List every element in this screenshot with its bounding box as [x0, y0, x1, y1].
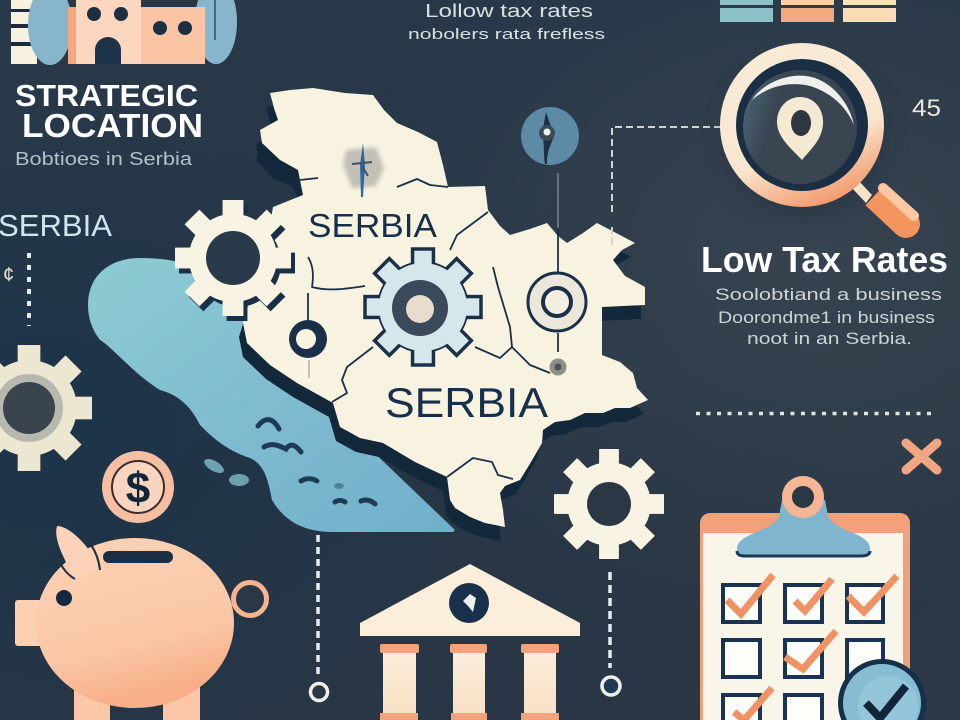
top text block: low tax rates	[408, 1, 605, 43]
text: low tax rates description: Soolobtiand a business	[715, 285, 942, 304]
label: map serbia lower: SERBIA	[385, 379, 548, 426]
clipboard clip	[737, 481, 870, 556]
text: low tax rates description: Doorondme1 in business	[718, 308, 935, 327]
node ring: right bottom	[602, 677, 620, 695]
heading: low tax rates: Low Tax Rates	[701, 239, 948, 280]
icon: coin	[102, 451, 174, 523]
dashed line: right bottom	[608, 572, 612, 668]
icon: piggy bank	[15, 526, 266, 720]
gear: right bottom	[554, 449, 664, 559]
icon: bank building	[360, 564, 580, 720]
dashed connector: to magnifier	[612, 127, 722, 247]
map: serbia	[243, 88, 648, 527]
text: low tax rates description: noot in an Serbia.	[747, 329, 912, 348]
icon: coin: $	[126, 464, 150, 513]
map shadow	[239, 102, 644, 541]
column left	[380, 644, 419, 720]
icon: top colour bars	[720, 0, 896, 22]
small number: 45	[912, 95, 941, 122]
heading: strategic location: LOCATION	[22, 107, 203, 144]
icon: coral x	[906, 443, 937, 470]
text: strategic location caption: Bobtioes in Serbia	[15, 149, 193, 169]
islands	[202, 420, 375, 504]
column right	[521, 644, 559, 720]
icon: magnifier	[720, 43, 920, 238]
heading: strategic location: STRATEGIC	[15, 78, 198, 113]
icon: city buildings	[11, 0, 237, 65]
node: map small circle	[289, 320, 327, 358]
text: low tax rates description	[715, 285, 942, 348]
check marks	[727, 575, 897, 720]
column centre	[450, 644, 487, 720]
small left glyph: ¢	[3, 264, 14, 286]
icon: blue pin circle	[521, 107, 579, 165]
label: left serbia: SERBIA	[0, 208, 112, 243]
icon: compass	[343, 143, 384, 197]
heading: strategic location	[15, 78, 203, 144]
icon: clipboard checklist	[700, 481, 926, 720]
checkboxes	[723, 585, 883, 720]
approval badge	[838, 659, 926, 720]
connector: blue pin to target	[557, 173, 559, 352]
dotted line: left	[27, 253, 31, 326]
dotted line: right	[696, 412, 932, 415]
gear: left	[0, 345, 92, 471]
dashed line: centre bottom	[316, 535, 320, 675]
node: small grey	[550, 358, 566, 376]
map borders	[300, 178, 550, 479]
top text block: low tax rates: Lollow tax rates	[425, 1, 593, 21]
node ring: centre bottom	[310, 684, 328, 700]
gear: map centre	[365, 249, 481, 365]
label: map serbia upper: SERBIA	[308, 207, 437, 244]
sea	[88, 258, 455, 532]
target circle	[528, 273, 586, 331]
gear: map left	[175, 200, 295, 321]
top text block: low tax rates: nobolers rata frefless	[408, 26, 605, 43]
